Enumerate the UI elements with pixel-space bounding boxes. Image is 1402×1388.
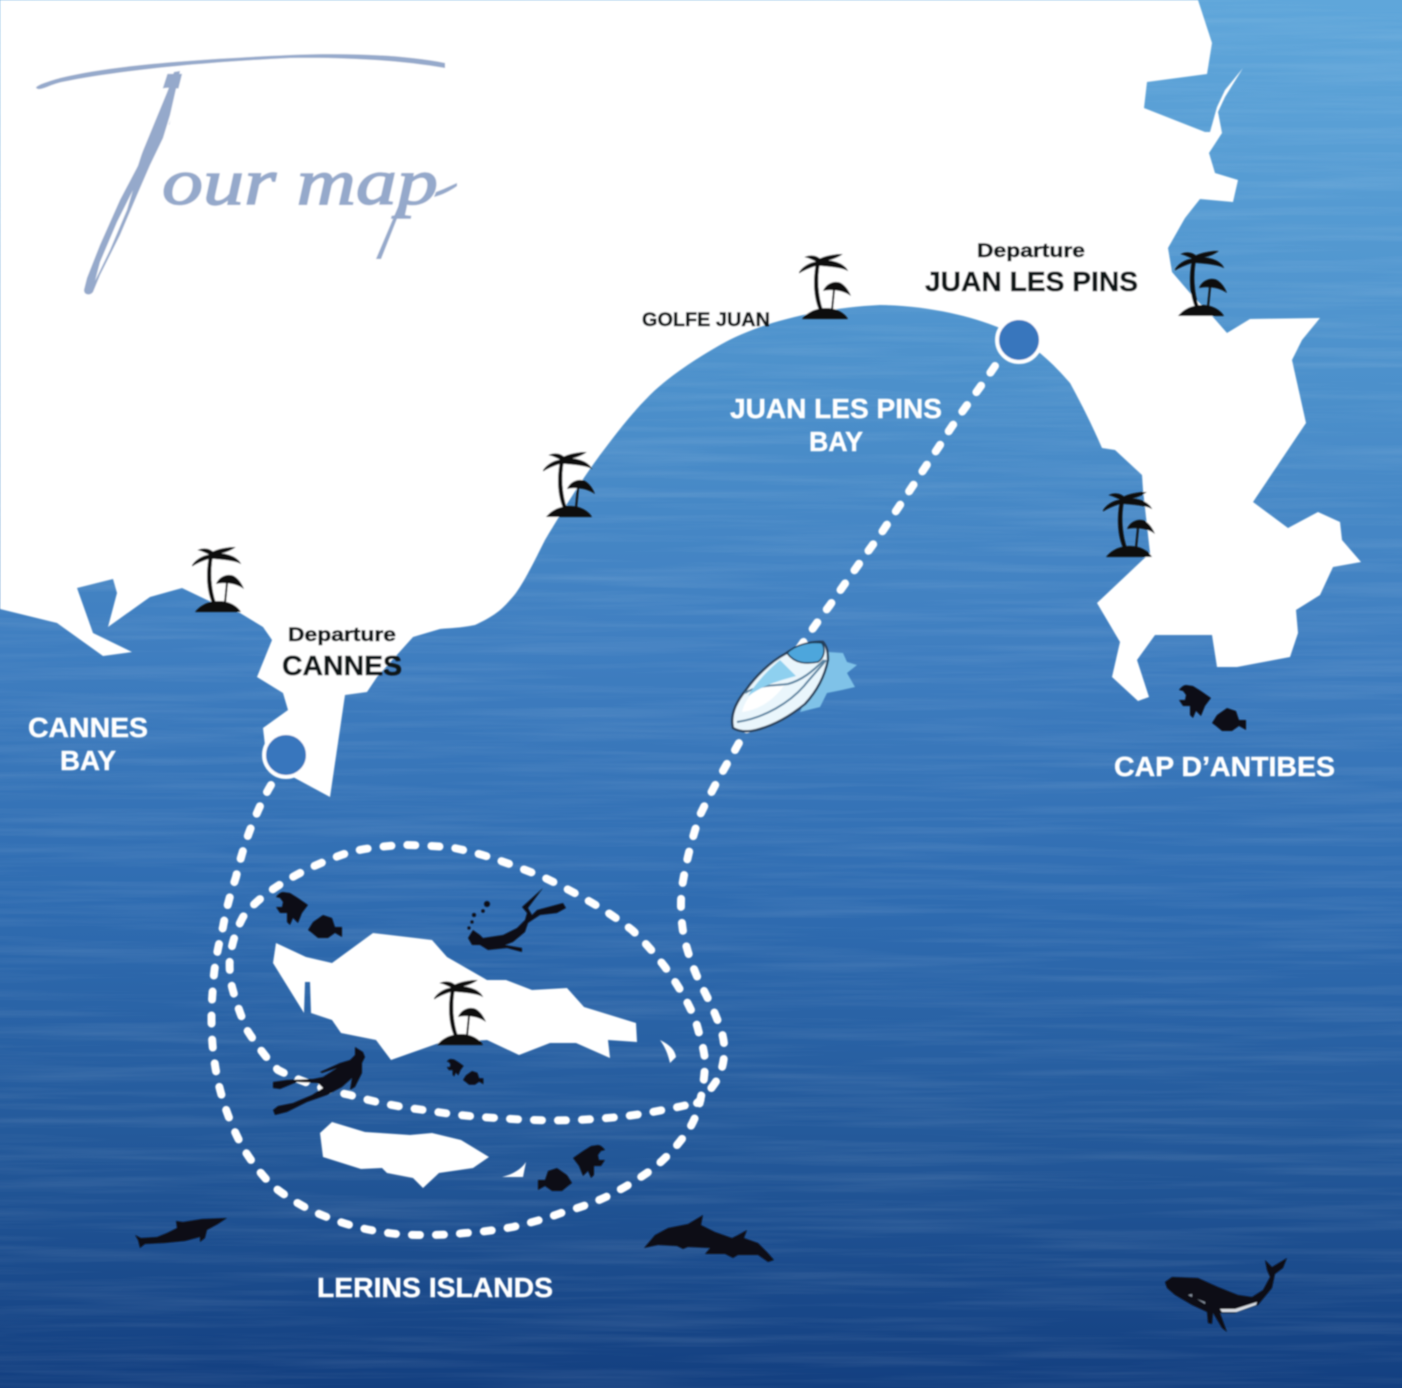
islet east of main island [660,1040,676,1063]
palm icon: main island [434,980,486,1045]
label: Cannes Bay [28,712,148,776]
dolphin pair [644,1215,774,1262]
title crossbar swash [36,54,445,89]
speedboat wake splash [800,652,857,712]
label: Golfe Juan: GOLFE JUAN [642,309,770,331]
island: Saint-Honorat [320,1122,489,1188]
mainland coast and Cap d'Antibes [0,0,1361,797]
label: Cap d'Antibes: CAP D’ANTIBES [1114,751,1335,782]
title: Tour map [36,53,458,296]
route: Cannes loop around the islands [212,785,705,1235]
title lowercase letters: our map [162,146,438,219]
island: Sainte-Marguerite [273,933,637,1060]
fish pair: north-west of island [276,892,342,938]
departure marker: Cannes [264,733,308,777]
palm icon: Cap d'Antibes west shore [1103,492,1155,557]
speedboat hull [732,642,828,731]
label: Departure Cannes: Departure [288,625,396,646]
fish pair: east of lower island [538,1145,605,1191]
title capital T letter: T [43,0,224,363]
palm icon: north of Cap d'Antibes [1175,251,1227,316]
palm icon: Golfe Juan [799,254,851,319]
dolphin: left [135,1218,227,1248]
label: Juan les Pins: JUAN LES PINS [925,266,1138,297]
whale [1165,1258,1287,1332]
label: Juan les Pins Bay: BAY [809,426,863,457]
palm icon: Cannes [192,547,244,612]
islet east of lower island [502,1162,526,1177]
scuba diver: upper [467,888,566,952]
palm icon: mid coast [543,452,595,517]
speedboat windscreen [787,642,824,663]
route: Juan les Pins to the islands [681,366,995,1103]
departure marker: Juan les Pins [997,318,1041,362]
label: Departure Juan les Pins: Departure [977,241,1085,262]
scuba diver: lower [273,1047,365,1115]
speedboat foredeck tint [748,660,796,696]
fish pair: Cap d'Antibes [1179,685,1246,731]
speedboat side band [737,660,826,722]
speedboat [732,642,857,731]
label: Cannes Bay: CANNES [28,712,148,743]
label: Juan les Pins Bay [730,393,942,457]
label: Juan les Pins Bay: JUAN LES PINS [730,393,942,424]
title p tail flourish [376,183,457,259]
label: Lerins Islands: LERINS ISLANDS [317,1272,553,1303]
label: Cannes: CANNES [282,650,402,681]
fish pair: below main island [447,1059,483,1085]
title T stem swash [84,71,180,294]
speedboat deck highlight [742,682,785,712]
label: Cannes Bay: BAY [60,745,116,776]
